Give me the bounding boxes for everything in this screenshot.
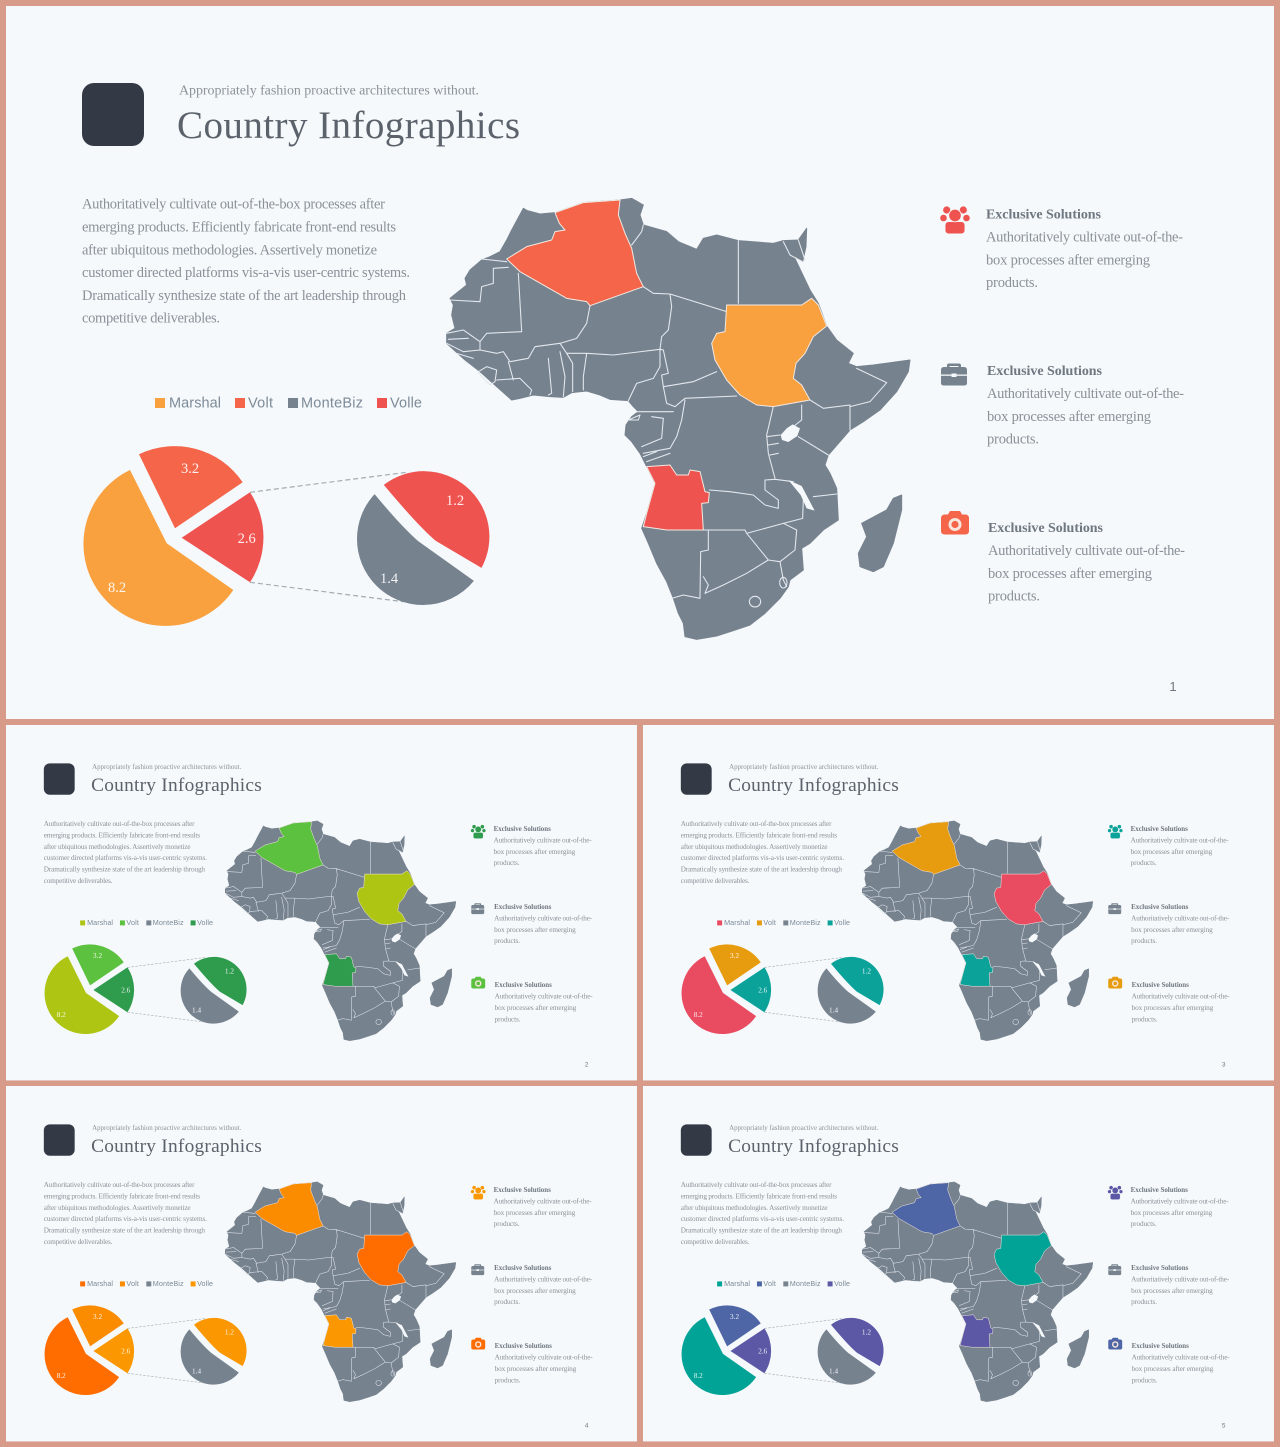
pie chart: main: 2.6 (758, 987, 768, 995)
icon: briefcase (471, 1264, 484, 1275)
chart legend: MonteBiz (790, 1279, 821, 1288)
feature text 2 (494, 1264, 593, 1306)
feature text 2: box processes after emerging (1131, 1287, 1213, 1295)
body text block: customer directed platforms vis-a-vis user-centric systems. (44, 1215, 207, 1223)
pie chart: breakdown: 1.2 (862, 1329, 871, 1337)
body text block (82, 196, 410, 326)
feature text 3: box processes after emerging (1132, 1365, 1214, 1373)
feature text 3: box processes after emerging (495, 1004, 577, 1012)
subtitle: Appropriately fashion proactive architectures without. (92, 763, 242, 771)
icon: logo square (681, 763, 712, 795)
chart legend: Marshal (87, 918, 113, 927)
title: Country Infographics (91, 775, 262, 796)
chart legend (155, 396, 422, 412)
body text block: after ubiquitous methodologies. Assertively monetize (681, 843, 828, 851)
feature text 2: products. (1131, 937, 1157, 945)
page number: 3 (1222, 1061, 1226, 1068)
feature text 1 (494, 1186, 592, 1228)
pie chart: breakdown: 1.4 (192, 1007, 201, 1015)
feature text 2: box processes after emerging (1131, 926, 1213, 934)
icon: logo square (44, 1124, 75, 1156)
feature text 2: products. (987, 432, 1039, 448)
connector lines (764, 957, 842, 1022)
feature text 1: box processes after emerging (494, 848, 576, 856)
feature text 2: Authoritatively cultivate out-of-the- (494, 1275, 593, 1283)
body text block: competitive deliverables. (44, 877, 113, 885)
connector lines (127, 957, 205, 1022)
feature text 1: Authoritatively cultivate out-of-the- (494, 836, 592, 844)
feature text 1 (986, 208, 1183, 291)
pie chart: breakdown (357, 471, 489, 605)
pie chart: main: 3.2 (93, 952, 102, 960)
feature text 1: products. (494, 1220, 520, 1228)
pie chart: breakdown (181, 1318, 247, 1385)
chart legend: Volle (834, 918, 850, 927)
chart legend: Marshal (724, 918, 750, 927)
pie chart: main: 8.2 (694, 1372, 703, 1380)
feature text 3 (495, 1342, 593, 1384)
feature text 3: box processes after emerging (988, 566, 1152, 582)
chart legend: Marshal (724, 1279, 750, 1288)
body text block: competitive deliverables. (44, 1238, 113, 1246)
feature text 1: Authoritatively cultivate out-of-the- (1131, 836, 1229, 844)
body text block: Authoritatively cultivate out-of-the-box processes after (681, 1181, 832, 1189)
icon: briefcase (1108, 903, 1121, 914)
feature text 2 (494, 903, 593, 945)
body text block: after ubiquitous methodologies. Assertively monetize (82, 242, 377, 258)
pie chart: main: 2.6 (121, 987, 131, 995)
feature text 3: products. (495, 1376, 521, 1384)
chart legend (80, 918, 213, 927)
subtitle: Appropriately fashion proactive architectures without. (729, 1124, 879, 1132)
feature text 1 (1131, 825, 1229, 867)
icon: camera (471, 977, 485, 988)
pie chart: breakdown: 1.2 (225, 968, 234, 976)
body text block: Dramatically synthesize state of the art leadership through (681, 866, 842, 874)
pie chart: breakdown: 1.4 (380, 571, 399, 587)
chart legend: Volt (763, 1279, 776, 1288)
icon: camera (471, 1338, 485, 1349)
body text block: emerging products. Efficiently fabricate front-end results (681, 1192, 837, 1200)
icon: briefcase (941, 364, 967, 386)
icon: briefcase (471, 903, 484, 914)
pie chart: breakdown: 1.4 (829, 1007, 838, 1015)
feature text 3: products. (1132, 1376, 1158, 1384)
feature text 3: Exclusive Solutions (988, 521, 1104, 536)
connector lines (764, 1318, 842, 1383)
feature text 1: products. (494, 859, 520, 867)
icon: logo square (44, 763, 75, 795)
feature text 3: Exclusive Solutions (1132, 981, 1189, 989)
map: Africa (225, 821, 456, 1041)
title: Country Infographics (91, 1136, 262, 1157)
map: Africa (225, 1182, 456, 1402)
feature text 2: Authoritatively cultivate out-of-the- (987, 386, 1184, 402)
body text block: after ubiquitous methodologies. Assertively monetize (681, 1204, 828, 1212)
feature text 3: Authoritatively cultivate out-of-the- (988, 543, 1185, 559)
page number: 2 (585, 1061, 589, 1068)
body text block: Dramatically synthesize state of the art leadership through (44, 1227, 205, 1235)
pie chart: main: 8.2 (108, 580, 126, 596)
pie chart: breakdown: 1.2 (446, 493, 464, 509)
pie chart: main: 3.2 (181, 461, 199, 477)
page number: 1 (1169, 679, 1177, 694)
body text block: customer directed platforms vis-a-vis user-centric systems. (681, 1215, 844, 1223)
pie chart: breakdown (818, 957, 884, 1024)
feature text 1 (1131, 1186, 1229, 1228)
icon: people (1108, 1186, 1123, 1200)
feature text 2 (1131, 1264, 1230, 1306)
chart legend: MonteBiz (301, 396, 363, 412)
feature text 2: Authoritatively cultivate out-of-the- (494, 914, 593, 922)
icon: logo square (681, 1124, 712, 1156)
connector lines (250, 472, 407, 602)
icon: people (471, 1186, 486, 1200)
pie chart: main: 2.6 (758, 1348, 768, 1356)
body text block: Dramatically synthesize state of the art leadership through (681, 1227, 842, 1235)
feature text 3: Authoritatively cultivate out-of-the- (1132, 993, 1230, 1001)
pie chart: main: 2.6 (121, 1348, 131, 1356)
body text block (681, 820, 844, 885)
feature text 1: Exclusive Solutions (494, 1186, 551, 1194)
body text block: competitive deliverables. (681, 1238, 750, 1246)
pie chart: breakdown (181, 957, 247, 1024)
feature text 2: products. (1131, 1298, 1157, 1306)
feature text 1: products. (1131, 859, 1157, 867)
feature text 1: box processes after emerging (986, 252, 1150, 268)
feature text 1: Authoritatively cultivate out-of-the- (494, 1197, 592, 1205)
feature text 3: products. (1132, 1015, 1158, 1023)
feature text 1: Exclusive Solutions (986, 208, 1102, 222)
feature text 2 (1131, 903, 1230, 945)
feature text 2 (987, 364, 1184, 448)
feature text 1: Authoritatively cultivate out-of-the- (1131, 1197, 1229, 1205)
panel: slide 1 (6, 6, 1274, 719)
body text block: customer directed platforms vis-a-vis user-centric systems. (44, 854, 207, 862)
connector lines (127, 1318, 205, 1383)
body text block: emerging products. Efficiently fabricate front-end results (44, 1192, 200, 1200)
pie chart: breakdown (818, 1318, 884, 1385)
feature text 1: box processes after emerging (1131, 1209, 1213, 1217)
title: Country Infographics (728, 775, 899, 796)
body text block: Authoritatively cultivate out-of-the-box processes after (44, 820, 195, 828)
feature text 2: box processes after emerging (987, 409, 1151, 425)
feature text 3: box processes after emerging (1132, 1004, 1214, 1012)
subtitle: Appropriately fashion proactive architectures without. (729, 763, 879, 771)
pie chart: breakdown: 1.2 (862, 968, 871, 976)
body text block: Authoritatively cultivate out-of-the-box processes after (82, 196, 385, 212)
feature text 1: products. (1131, 1220, 1157, 1228)
icon: camera (1108, 1338, 1122, 1349)
chart legend: MonteBiz (790, 918, 821, 927)
chart legend: MonteBiz (153, 918, 184, 927)
feature text 3: Authoritatively cultivate out-of-the- (495, 993, 593, 1001)
body text block: Authoritatively cultivate out-of-the-box processes after (681, 820, 832, 828)
chart legend: MonteBiz (153, 1279, 184, 1288)
feature text 2: products. (494, 1298, 520, 1306)
panel: slide 2 (6, 725, 637, 1080)
icon: camera (1108, 977, 1122, 988)
chart legend: Volle (834, 1279, 850, 1288)
pie chart: main (83, 446, 263, 626)
body text block: customer directed platforms vis-a-vis user-centric systems. (82, 265, 410, 281)
feature text 1: products. (986, 275, 1038, 291)
map: Africa (862, 821, 1093, 1041)
feature text 3 (495, 981, 593, 1023)
icon: people (940, 206, 970, 234)
pie chart: main: 3.2 (730, 1313, 739, 1321)
icon: briefcase (1108, 1264, 1121, 1275)
pie chart: main: 8.2 (57, 1011, 66, 1019)
body text block: competitive deliverables. (82, 310, 220, 326)
feature text 1 (494, 825, 592, 867)
chart legend: Volt (126, 1279, 139, 1288)
feature text 2: Exclusive Solutions (1131, 903, 1189, 911)
feature text 2: Authoritatively cultivate out-of-the- (1131, 1275, 1230, 1283)
feature text 1: Exclusive Solutions (494, 825, 551, 833)
chart legend: Marshal (87, 1279, 113, 1288)
chart legend: Volt (126, 918, 139, 927)
feature text 2: box processes after emerging (494, 926, 576, 934)
feature text 2: Exclusive Solutions (494, 1264, 552, 1272)
feature text 3 (988, 521, 1185, 604)
pie chart: main (45, 1305, 134, 1395)
page number: 4 (585, 1422, 589, 1429)
feature text 3: Authoritatively cultivate out-of-the- (1132, 1354, 1230, 1362)
chart legend (717, 1279, 850, 1288)
chart legend: Volle (390, 396, 422, 412)
pie chart: main (45, 944, 134, 1034)
pie chart: main (682, 944, 771, 1034)
panel: slide 5 (643, 1086, 1274, 1441)
pie chart: main: 3.2 (730, 952, 739, 960)
pie chart: main: 2.6 (238, 531, 256, 547)
feature text 1: Authoritatively cultivate out-of-the- (986, 230, 1183, 246)
feature text 3: products. (495, 1015, 521, 1023)
feature text 3 (1132, 981, 1230, 1023)
chart legend: Volt (763, 918, 776, 927)
pie chart: main: 3.2 (93, 1313, 102, 1321)
pie chart: breakdown: 1.2 (225, 1329, 234, 1337)
pie chart: main: 8.2 (694, 1011, 703, 1019)
feature text 3: Exclusive Solutions (1132, 1342, 1189, 1350)
body text block: after ubiquitous methodologies. Assertively monetize (44, 1204, 191, 1212)
panel: slide 4 (6, 1086, 637, 1441)
feature text 3: Exclusive Solutions (495, 981, 552, 989)
body text block: Dramatically synthesize state of the art leadership through (82, 288, 407, 304)
chart legend: Volt (248, 396, 273, 412)
pie chart: main (682, 1305, 771, 1395)
feature text 1: Exclusive Solutions (1131, 825, 1188, 833)
body text block: after ubiquitous methodologies. Assertively monetize (44, 843, 191, 851)
body text block: customer directed platforms vis-a-vis user-centric systems. (681, 854, 844, 862)
icon: camera (941, 511, 969, 534)
feature text 3: Exclusive Solutions (495, 1342, 552, 1350)
feature text 3: Authoritatively cultivate out-of-the- (495, 1354, 593, 1362)
body text block (44, 1181, 207, 1246)
body text block: emerging products. Efficiently fabricate front-end results (681, 831, 837, 839)
feature text 2: Authoritatively cultivate out-of-the- (1131, 914, 1230, 922)
feature text 3: products. (988, 588, 1040, 604)
map: Africa (862, 1182, 1093, 1402)
feature text 2: products. (494, 937, 520, 945)
body text block (44, 820, 207, 885)
body text block: competitive deliverables. (681, 877, 750, 885)
pie chart: breakdown: 1.4 (829, 1368, 838, 1376)
panel: slide 3 (643, 725, 1274, 1080)
chart legend: Volle (197, 1279, 213, 1288)
title: Country Infographics (177, 104, 520, 147)
chart legend: Volle (197, 918, 213, 927)
feature text 1: box processes after emerging (494, 1209, 576, 1217)
chart legend: Marshal (169, 396, 221, 412)
page number: 5 (1222, 1422, 1226, 1429)
icon: people (471, 825, 486, 839)
title: Country Infographics (728, 1136, 899, 1157)
body text block: emerging products. Efficiently fabricate front-end results (82, 220, 396, 236)
map: Africa (447, 198, 910, 639)
feature text 2: Exclusive Solutions (494, 903, 552, 911)
body text block (681, 1181, 844, 1246)
body text block: Dramatically synthesize state of the art leadership through (44, 866, 205, 874)
body text block: Authoritatively cultivate out-of-the-box processes after (44, 1181, 195, 1189)
body text block: emerging products. Efficiently fabricate front-end results (44, 831, 200, 839)
chart legend (80, 1279, 213, 1288)
icon: people (1108, 825, 1123, 839)
icon: logo square (82, 83, 144, 146)
subtitle: Appropriately fashion proactive architectures without. (92, 1124, 242, 1132)
feature text 2: box processes after emerging (494, 1287, 576, 1295)
feature text 1: box processes after emerging (1131, 848, 1213, 856)
feature text 2: Exclusive Solutions (987, 364, 1103, 379)
feature text 3: box processes after emerging (495, 1365, 577, 1373)
pie chart: breakdown: 1.4 (192, 1368, 201, 1376)
feature text 3 (1132, 1342, 1230, 1384)
pie chart: main: 8.2 (57, 1372, 66, 1380)
feature text 1: Exclusive Solutions (1131, 1186, 1188, 1194)
feature text 2: Exclusive Solutions (1131, 1264, 1189, 1272)
chart legend (717, 918, 850, 927)
subtitle: Appropriately fashion proactive architectures without. (179, 84, 479, 98)
